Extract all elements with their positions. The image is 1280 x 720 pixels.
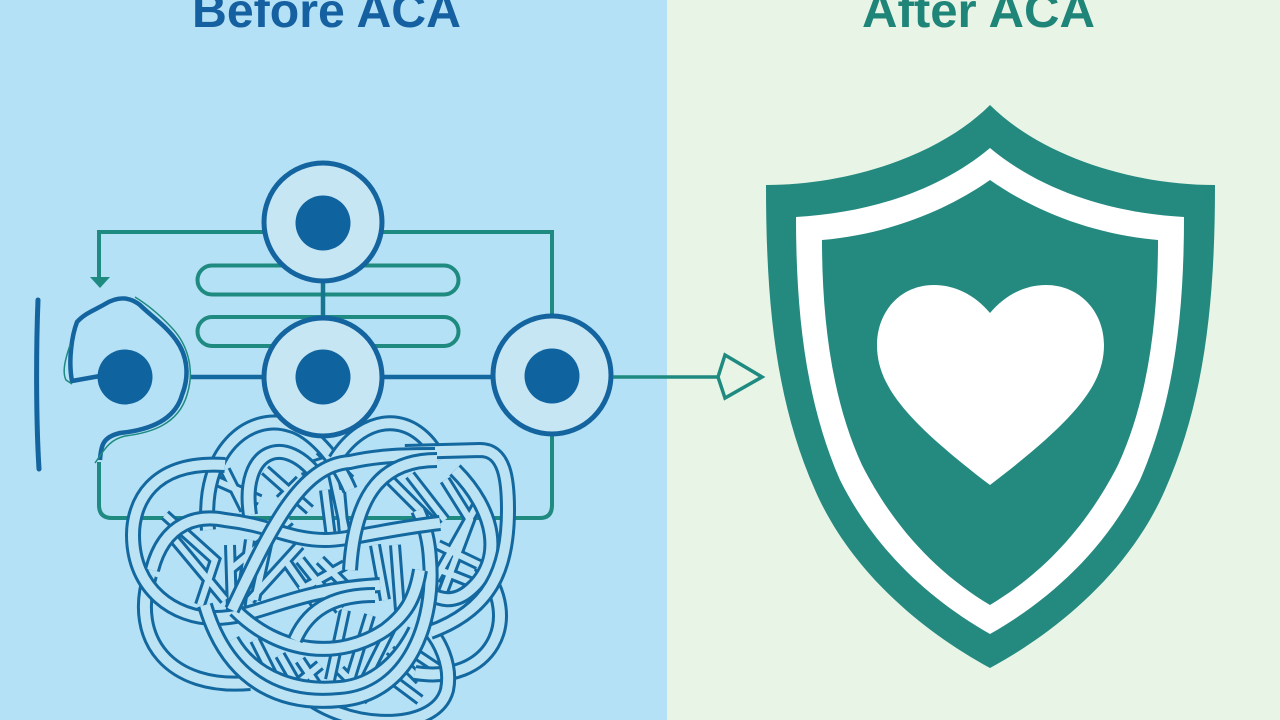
inner knot filler bands (165, 450, 490, 700)
teal connector lines (99, 232, 552, 518)
node: broken left (64, 297, 190, 463)
icon: down arrowhead (90, 277, 110, 288)
shield inner (822, 180, 1158, 605)
shield white band (796, 148, 1184, 634)
vertical bar (37, 300, 39, 469)
icon: shield with heart (766, 105, 1215, 668)
blue connector lines (190, 283, 492, 377)
node: middle (264, 318, 382, 436)
shield outer (766, 105, 1215, 668)
icon: heart (877, 285, 1104, 485)
flow diagram: connected nodes (37, 163, 762, 518)
arrow: before to after (613, 355, 762, 398)
strands (133, 422, 508, 720)
panel: after ACA background (667, 0, 1280, 720)
tangled knot of strands (133, 422, 508, 720)
panel: before ACA background (0, 0, 667, 720)
node: top (264, 163, 382, 281)
node: right (493, 316, 611, 434)
